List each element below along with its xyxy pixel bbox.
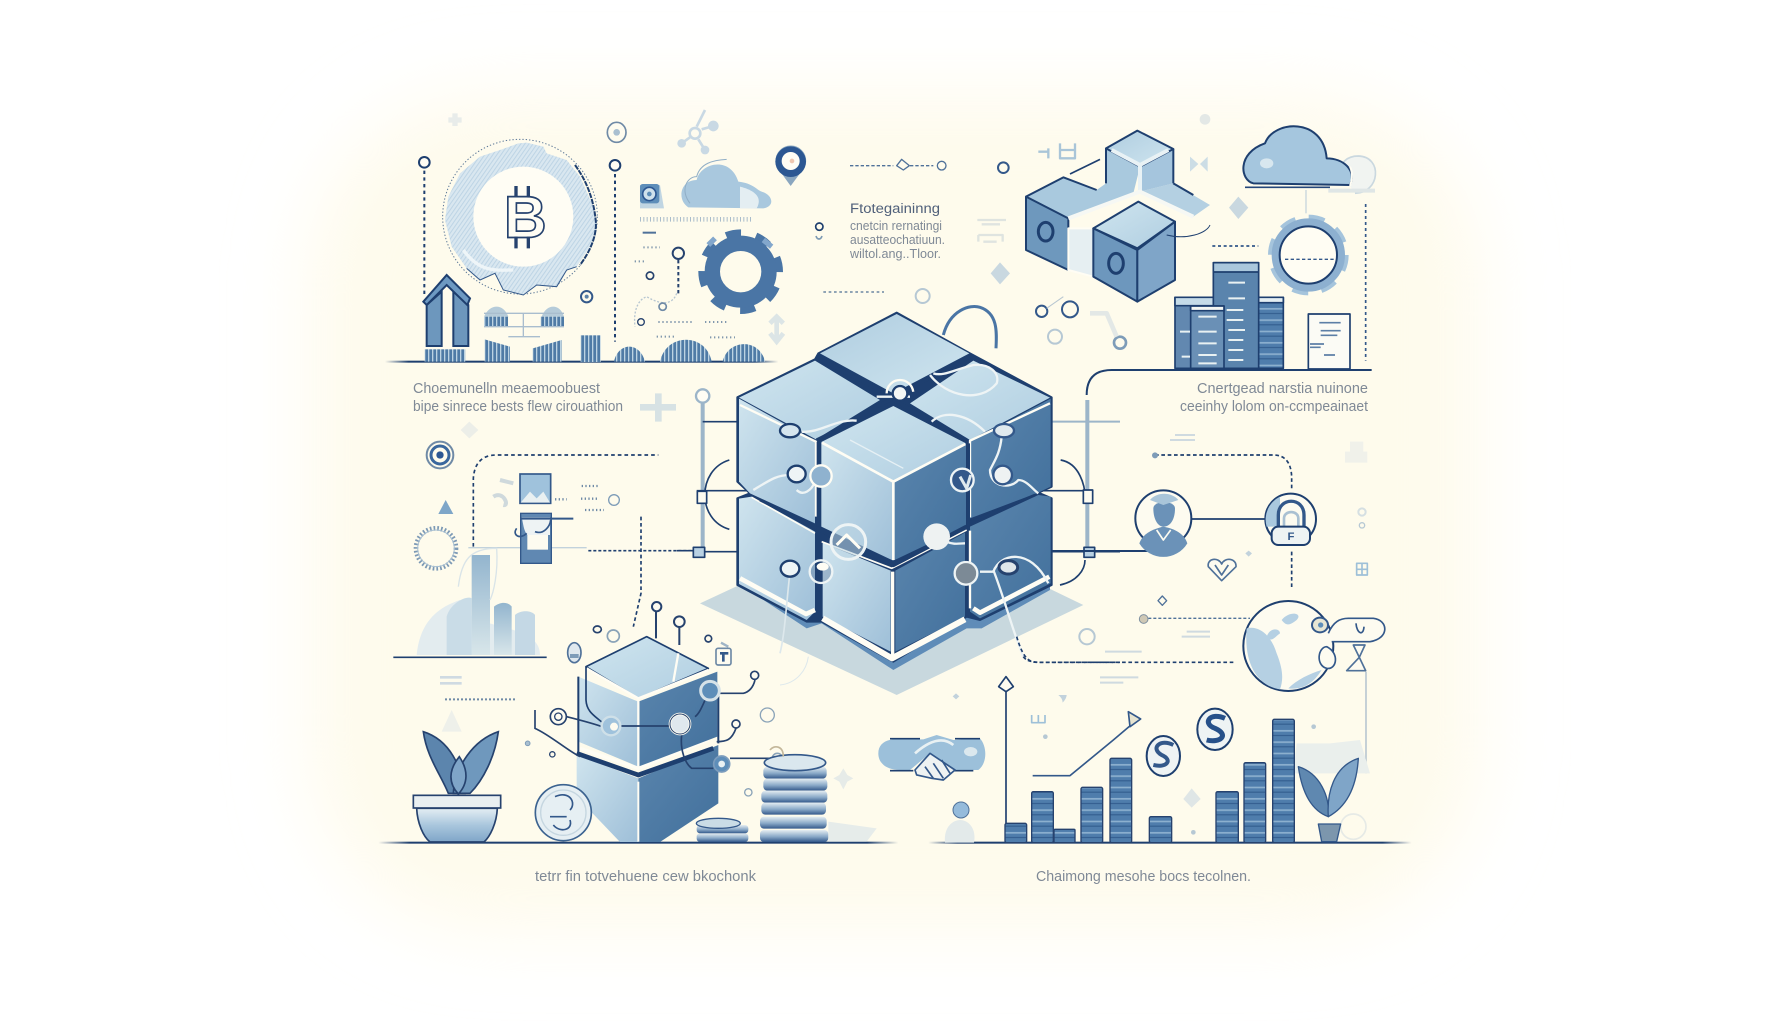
side node <box>816 223 884 292</box>
icon: user avatar <box>1135 490 1191 557</box>
icon: small double cube <box>577 637 718 842</box>
caption: left upper <box>413 380 623 415</box>
icon: padlock <box>1265 494 1316 545</box>
bar chart <box>1005 719 1294 843</box>
icon: tall coin stack <box>760 747 828 842</box>
dotted rule <box>445 696 517 702</box>
dotted link <box>588 548 693 553</box>
diamond faint <box>1183 788 1201 808</box>
icon: location pin <box>775 145 806 186</box>
faint small glyphs <box>1032 563 1367 723</box>
icon: gear <box>692 223 789 320</box>
back top slab <box>820 314 969 393</box>
small rings right <box>1079 508 1366 644</box>
node rings <box>780 380 1018 585</box>
faint star <box>833 768 853 789</box>
navy backing <box>737 313 1052 662</box>
icon: isometric cubes <box>1026 131 1210 302</box>
small labels <box>440 677 462 683</box>
dashed path over lock <box>1155 455 1292 488</box>
tick strip <box>640 212 753 226</box>
text block: top center: cnetcin rernatingi <box>850 219 942 233</box>
cream background glow <box>310 95 1480 930</box>
icon: small brackets <box>1038 143 1075 158</box>
network nodes on small cube <box>525 671 782 796</box>
dashed bottom link <box>1017 637 1233 662</box>
caption: bottom right: Chaimong mesohe bocs tecolnen. <box>1036 868 1251 885</box>
icon: faint plus <box>448 113 462 126</box>
text block: top center: Ftotegaininng <box>850 201 940 216</box>
icon: bridge cluster <box>484 307 564 362</box>
faint dots <box>1200 114 1210 125</box>
faint diamond <box>461 422 478 438</box>
icon: potted plant <box>413 732 501 842</box>
text block: top center: ausatteochatiuun. <box>850 233 945 247</box>
icon: small diamond <box>1158 596 1167 605</box>
icon: target <box>427 442 453 468</box>
pale bar chart <box>417 548 540 655</box>
faint rings <box>916 289 1062 344</box>
dashed link from cube <box>1023 657 1120 662</box>
antenna nodes <box>568 602 731 682</box>
ghost arrow <box>770 317 783 342</box>
faint bars <box>977 220 1006 242</box>
lower left cube <box>739 497 815 620</box>
icon: triangle <box>438 500 453 514</box>
faint cross <box>640 393 676 422</box>
thick seams <box>760 357 1035 565</box>
ground line right <box>928 842 1412 844</box>
icon: target ring <box>581 291 592 302</box>
panel: right lower security and growth <box>878 435 1412 844</box>
icon: arrow up axis <box>999 677 1013 823</box>
link user to lock <box>1192 516 1265 521</box>
text block: top center <box>849 201 945 261</box>
center lower cube <box>822 530 967 658</box>
dashed to globe <box>1148 616 1250 620</box>
baseline under pale chart <box>393 655 547 660</box>
dashed node globe <box>1139 615 1148 623</box>
icon: document <box>1308 314 1350 369</box>
floor shadow <box>700 513 1083 695</box>
caption: right upper: Cnertgead narstia nuinone <box>1197 381 1368 397</box>
icon: cloud <box>1243 126 1375 213</box>
dash marks <box>643 230 656 236</box>
block underside shadow <box>748 567 1050 670</box>
person marker <box>945 802 975 843</box>
lower right cube <box>970 495 1051 618</box>
caption: bottom left: tetrr fin totvehuene cew bkochonk <box>535 868 756 885</box>
icon: plant right <box>1298 758 1358 842</box>
icon: robot tile <box>515 513 573 563</box>
icon: server towers <box>1175 263 1283 368</box>
icon: faded molecule <box>677 110 719 154</box>
main ground line <box>378 842 898 844</box>
vertical dashed <box>633 517 641 627</box>
upper left cube <box>739 361 880 523</box>
node trail <box>635 248 684 327</box>
icon: large coin <box>535 785 591 841</box>
icon: dollar coin small <box>1147 736 1180 776</box>
connector line right <box>1087 370 1372 395</box>
icon: bitcoin gear: B <box>504 183 547 250</box>
dashed node <box>1152 452 1158 458</box>
padlock shackle arc <box>943 306 996 348</box>
panel: top-left bitcoin section <box>385 110 884 438</box>
icon: heart <box>1208 559 1236 581</box>
ground line top left <box>385 361 778 363</box>
icon: textured ring <box>416 528 456 568</box>
panel: left middle chart and widgets <box>378 442 898 844</box>
caption: right upper: ceeinhy lolom on-ccmpeainaet <box>1180 399 1368 415</box>
caption: left upper: Choemunelln meaemoobuest <box>413 380 601 397</box>
icon: dollar coin large <box>1197 709 1233 750</box>
icon: camera tile <box>640 184 664 208</box>
pale rule <box>468 546 587 550</box>
faint triangle <box>442 710 462 732</box>
text block: top center: wiltol.ang..Tloor. <box>849 247 941 261</box>
center upper cube <box>821 406 966 561</box>
right dashed rule <box>1363 204 1368 361</box>
icon: small coin stack <box>696 818 748 842</box>
small rings <box>998 162 1126 349</box>
small dashes <box>1100 435 1210 683</box>
icon: check circle <box>609 495 619 505</box>
small buildings and domes <box>581 335 765 362</box>
icon: cloud faded <box>681 159 771 208</box>
caption: left upper: bipe sinrece bests flew cirouathion <box>413 398 623 415</box>
caption: right upper <box>1180 381 1368 415</box>
icon: map pin speech capsule <box>1312 618 1385 668</box>
faint bowtie <box>1190 157 1208 172</box>
white flowing wires <box>753 365 1048 685</box>
faint diamonds <box>991 197 1248 284</box>
faded blobs <box>493 480 513 505</box>
tiny accents <box>953 551 1252 703</box>
tiny dots <box>635 247 735 337</box>
icon: hourglass <box>1347 645 1366 671</box>
icon: gear ring <box>1271 218 1346 292</box>
icon: globe <box>1243 601 1333 691</box>
pale circle beside plant <box>1341 814 1366 839</box>
thin link down <box>1364 672 1368 773</box>
icon: bitcoin gear <box>443 139 597 295</box>
trend arrow <box>1033 712 1141 776</box>
dashed circuit path <box>473 455 658 547</box>
upper right cube <box>910 361 1051 518</box>
dashed rule <box>1212 243 1258 248</box>
top connector fragment <box>850 159 946 170</box>
dots accent <box>1043 724 1316 835</box>
faint stamp <box>1345 442 1367 463</box>
pin line left <box>419 157 430 297</box>
panel: central blockchain cube <box>677 306 1120 695</box>
tiny text dots <box>555 486 604 510</box>
icon: padlock: F <box>1288 531 1295 543</box>
icon: atom ring <box>607 122 626 142</box>
dashed below lock <box>1289 552 1294 588</box>
icon: up arrow house <box>423 275 470 362</box>
link line from cube to user <box>1052 543 1183 551</box>
faded scenery <box>1293 740 1370 773</box>
side connector rails <box>677 389 1120 585</box>
faded scenery beside coins <box>828 822 877 842</box>
icon: handshake <box>878 735 985 780</box>
pin line right <box>610 160 620 342</box>
panel: top-right isometric blocks, cloud and servers <box>850 114 1375 395</box>
icon: picture tile <box>520 474 551 503</box>
